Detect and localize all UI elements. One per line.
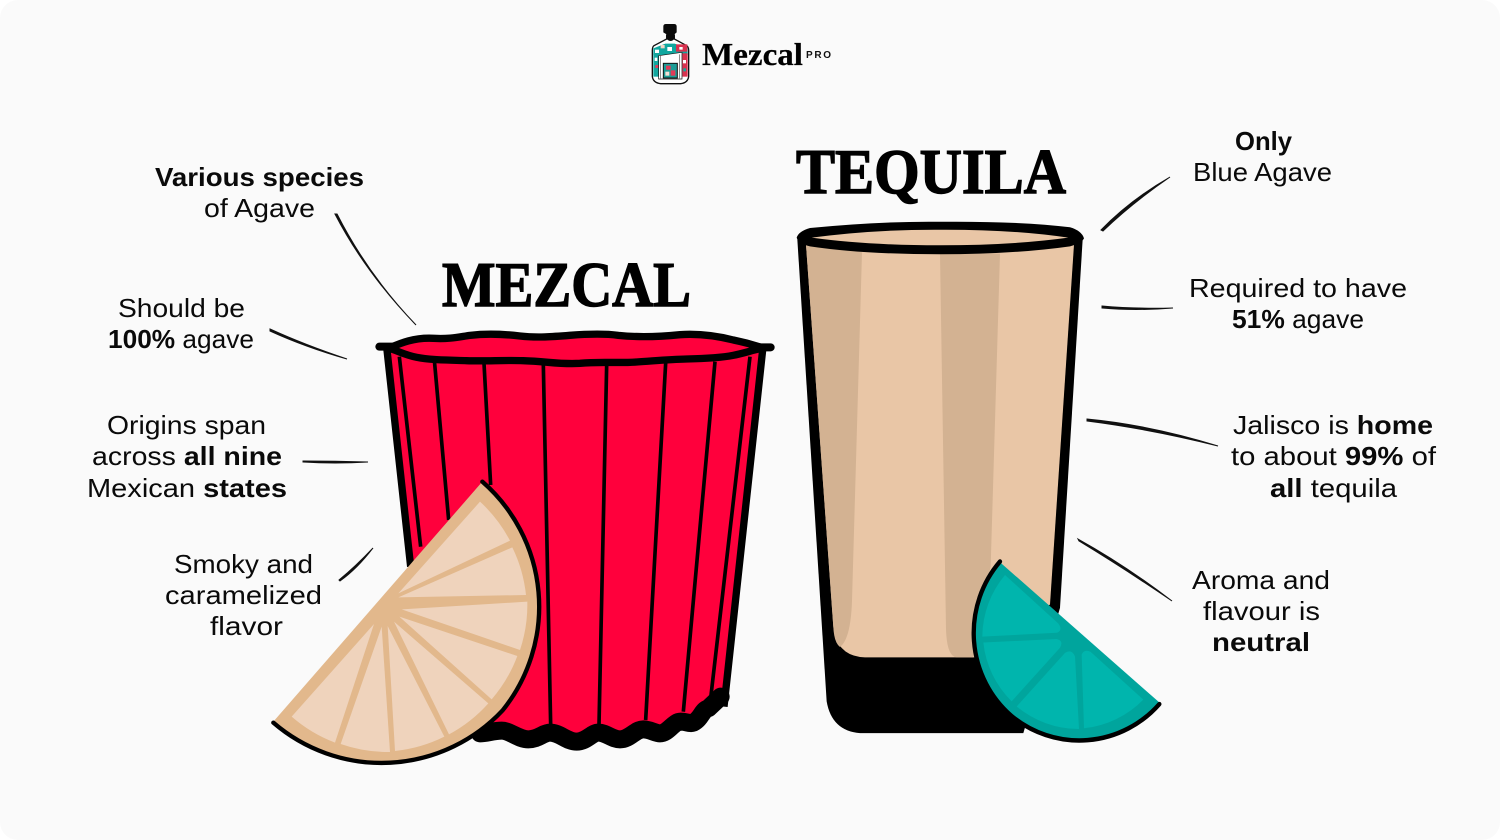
- text: 51% agave: Required to have: [1189, 273, 1407, 303]
- wordmark: Mezcal: [702, 36, 803, 72]
- glass walls: [387, 350, 763, 707]
- illustration: orange slice: [273, 482, 539, 763]
- glass flutes: [399, 357, 750, 725]
- text: smoky flavor: flavor: [210, 611, 283, 641]
- pulp segments: [292, 502, 527, 752]
- glass body: [387, 350, 763, 742]
- text: 100% agave: [108, 293, 254, 354]
- text: various species: Various species: [155, 162, 364, 192]
- leader line: various species: [335, 214, 416, 325]
- text: Jalisco: to about 99% of: [1231, 441, 1437, 471]
- text: various species: [155, 162, 364, 223]
- text: smoky flavor: caramelized: [165, 580, 322, 610]
- illustration: tequila glass: [797, 222, 1084, 733]
- text: 51% agave: 51% agave: [1232, 304, 1364, 334]
- rim: [797, 222, 1084, 254]
- heading: Mezcal: MEZCAL: [442, 250, 691, 320]
- glass outline: [797, 239, 1083, 733]
- wavy rim: [388, 334, 763, 364]
- leader line: origins: [303, 461, 368, 463]
- text: Jalisco: [1231, 410, 1437, 503]
- text: smoky flavor: [165, 549, 322, 641]
- outer black rind stroke: [273, 482, 539, 763]
- text: aroma: neutral: [1212, 627, 1310, 657]
- text: Jalisco: all tequila: [1270, 473, 1398, 503]
- text: origins: Origins span: [107, 410, 266, 440]
- rim end caps: [379, 335, 771, 359]
- text: smoky flavor: Smoky and: [174, 549, 313, 579]
- text: Jalisco: Jalisco is home: [1233, 410, 1433, 440]
- leader line: 100% agave: [270, 329, 347, 359]
- leader line: smoky: [339, 548, 373, 581]
- heading: Tequila: TEQUILA: [796, 137, 1066, 207]
- text: 100% agave: 100% agave: [108, 324, 254, 354]
- text: only blue agave: [1193, 126, 1332, 187]
- text: aroma: [1192, 565, 1330, 657]
- black outline: [974, 562, 1159, 740]
- text: aroma: Aroma and: [1192, 565, 1330, 595]
- text: 51% agave: [1189, 273, 1407, 334]
- text: origins: Mexican states: [87, 473, 287, 503]
- liquid: [806, 245, 1074, 657]
- rind: [273, 482, 539, 762]
- leader line: aroma: [1078, 539, 1172, 601]
- logo: Mezcal Pro: [652, 24, 831, 84]
- left shadow stripe: [806, 245, 862, 647]
- flesh segments: [982, 575, 1143, 729]
- wavy base: [480, 697, 721, 742]
- text: 100% agave: Should be: [118, 293, 245, 323]
- text: only blue agave: Blue Agave: [1193, 157, 1332, 187]
- illustration: mezcal glass: [379, 334, 771, 742]
- rind: [974, 562, 1160, 740]
- illustration: lime slice: [974, 562, 1160, 740]
- text: origins: across all nine: [92, 441, 282, 471]
- icon: mosaic bottle: [652, 24, 689, 84]
- leader line: blue agave: [1101, 177, 1170, 231]
- leader line: 51% agave: [1102, 306, 1173, 310]
- leader line: Jalisco: [1087, 419, 1218, 446]
- text: only blue agave: Only: [1235, 126, 1293, 156]
- text: various species: of Agave: [204, 193, 315, 223]
- rim opening: [812, 230, 1068, 245]
- centre shadow stripe: [940, 254, 1000, 657]
- text: aroma: flavour is: [1203, 596, 1320, 626]
- text: origins: [87, 410, 287, 503]
- wordmark suffix: PRO: [806, 50, 831, 61]
